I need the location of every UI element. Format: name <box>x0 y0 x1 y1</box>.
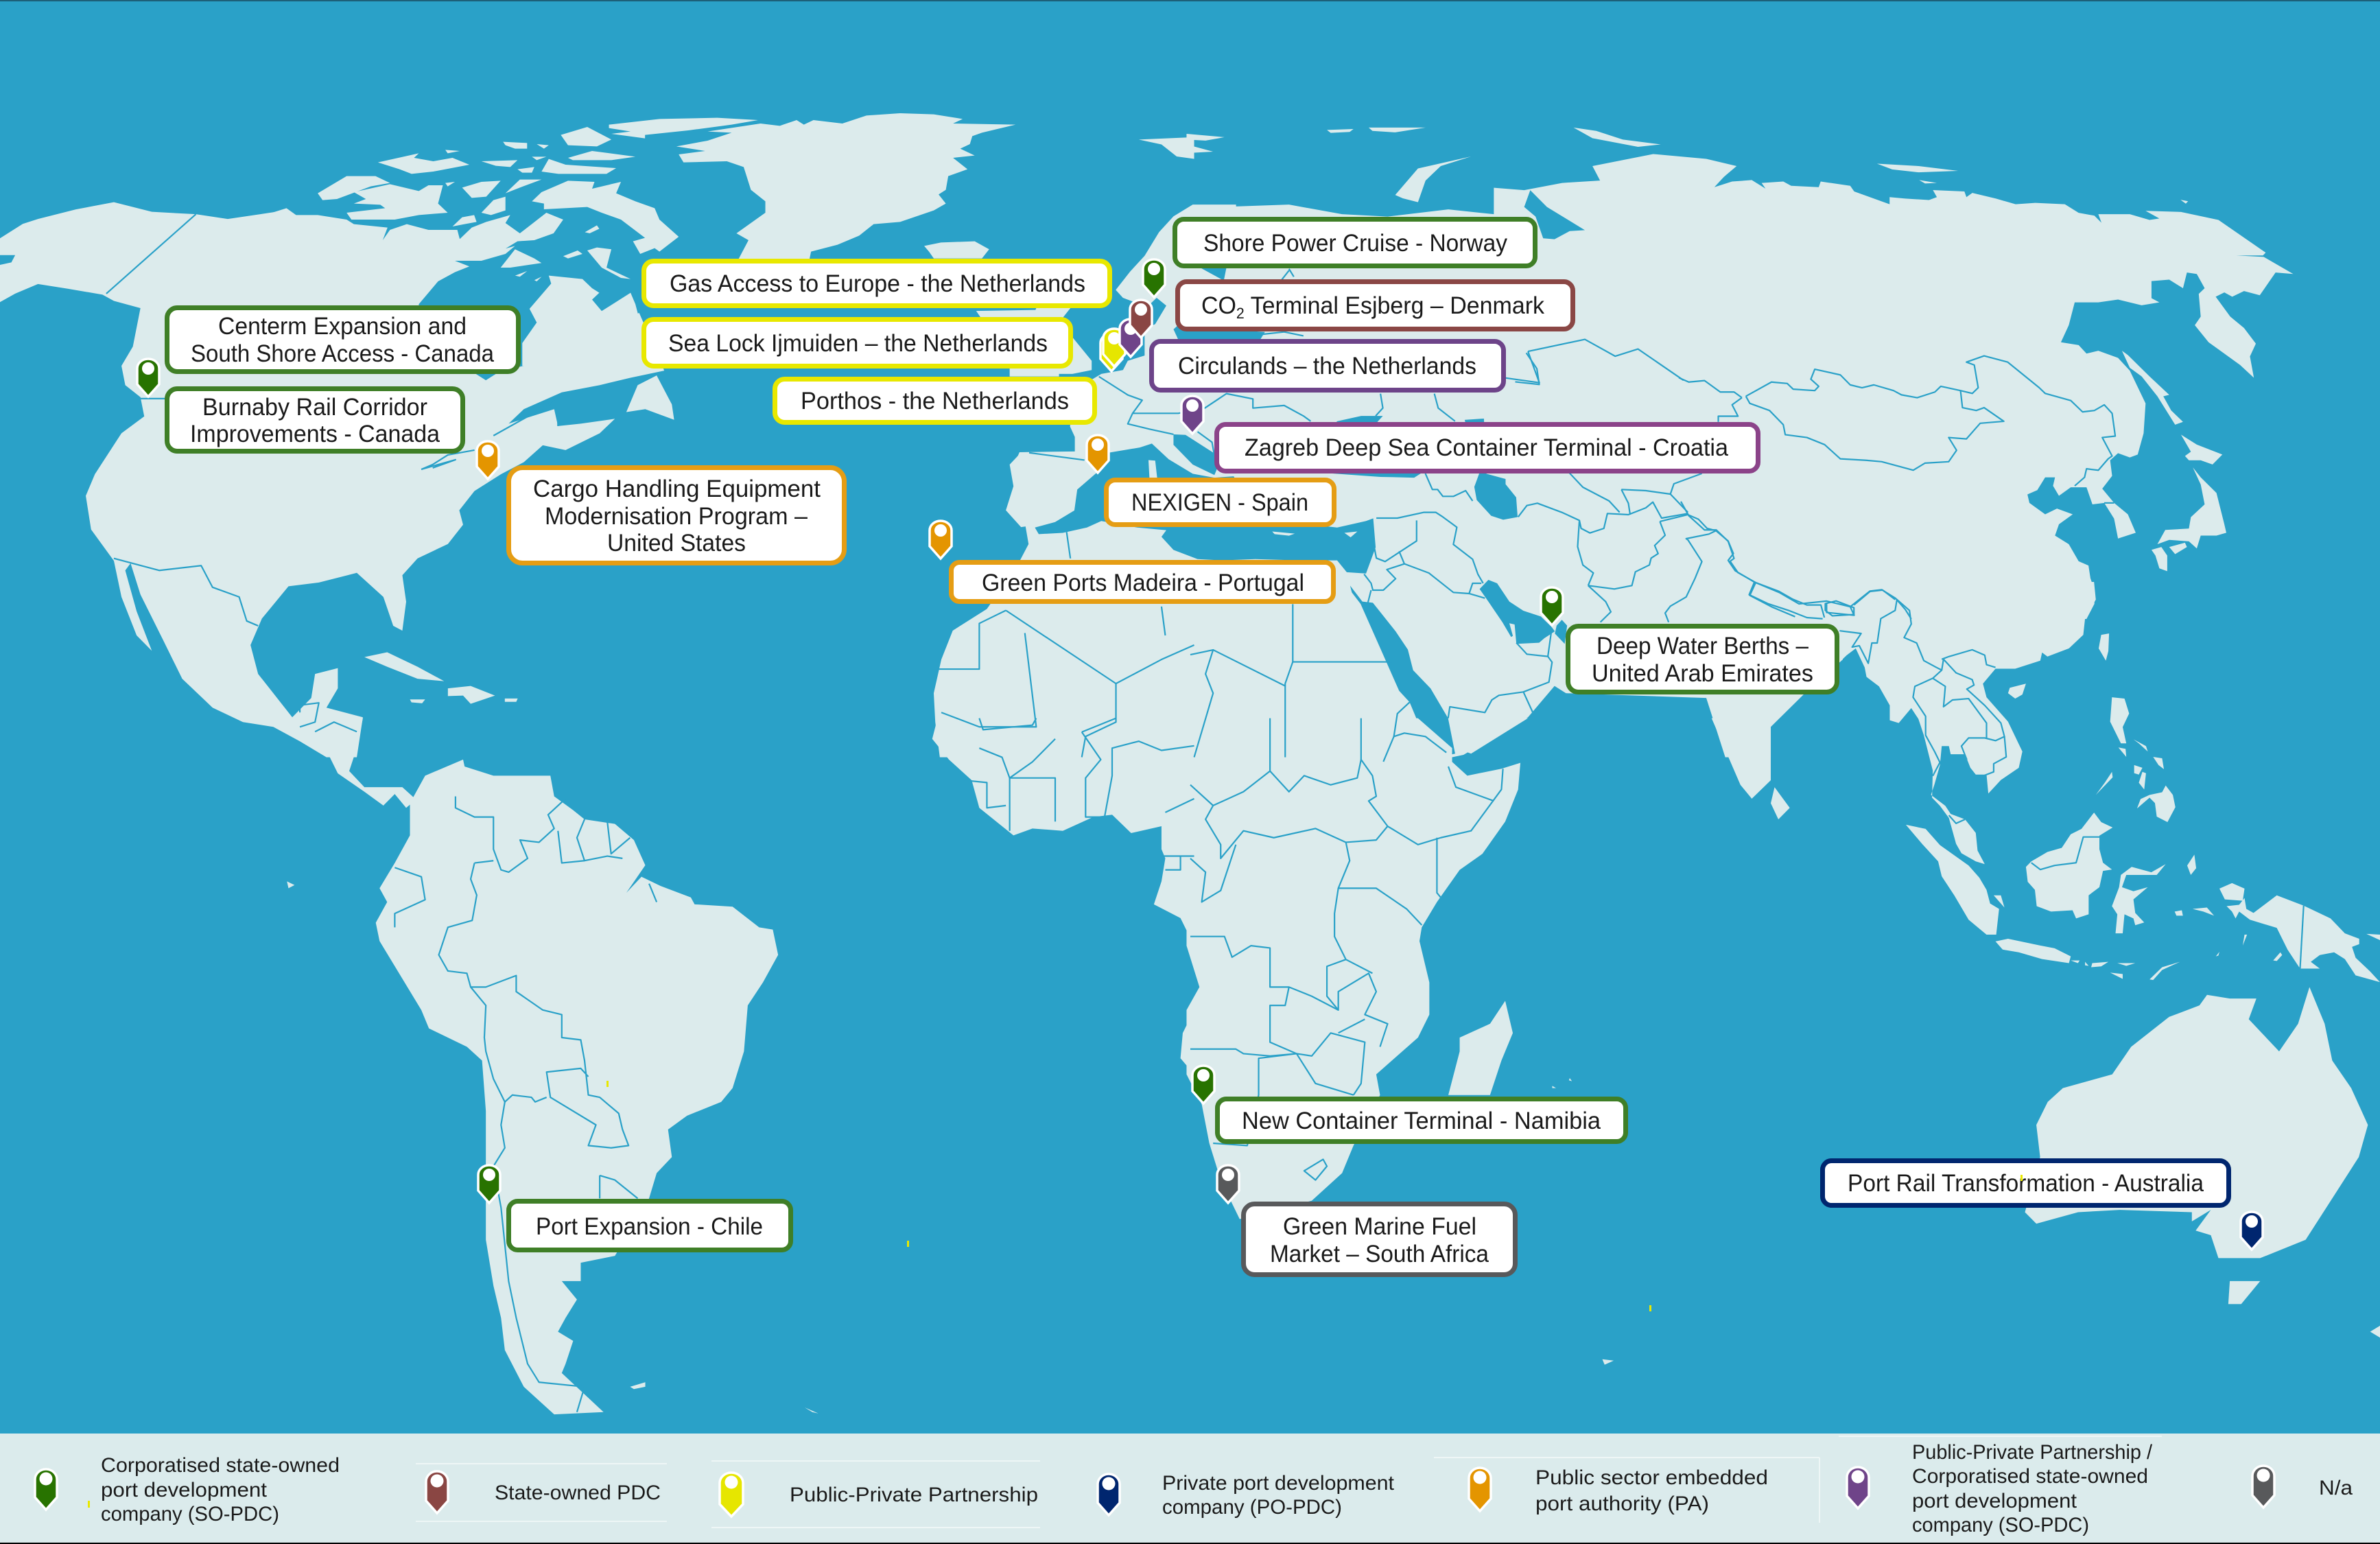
map: country borders Middle East and South Asia <box>1364 472 1824 762</box>
pin: Netherlands yellow rear <box>1100 334 1122 371</box>
legend item: corporatised state-owned: port development <box>101 1479 268 1501</box>
label: Shore Power <box>1175 220 1535 266</box>
legend item: public-private / corporatised: port development <box>1912 1490 2077 1512</box>
map: Arctic Canada, Greenland and Iceland <box>272 113 1015 366</box>
label: Porthos: Porthos - the Netherlands <box>801 388 1069 414</box>
label: Cargo Handling: United States <box>607 530 746 557</box>
label: Green Ports Madeira <box>951 563 1334 601</box>
label: Porthos <box>775 379 1095 423</box>
legend item: n/a <box>2252 1466 2353 1508</box>
label: Circulands: Circulands – the Netherlands <box>1178 353 1476 379</box>
pin: Australia navy <box>2241 1212 2263 1250</box>
label: Gas Access <box>644 261 1110 306</box>
map: country borders Europe <box>1029 269 1540 460</box>
label: Sea Lock <box>644 320 1070 366</box>
map: country borders central and southern Africa <box>1190 718 1503 1180</box>
label: Port Expansion <box>509 1201 790 1250</box>
label: Zagreb: Zagreb Deep Sea Container Terminal - Croatia <box>1245 434 1729 461</box>
pin: United States orange <box>477 441 499 479</box>
legend item: public sector embedded: Public sector embedded <box>1535 1466 1768 1489</box>
label: Deep Water Berths: United Arab Emirates <box>1592 660 1813 687</box>
pin: South Africa grey <box>1217 1165 1239 1203</box>
label: Centerm Expansion: Centerm Expansion and <box>218 313 467 340</box>
label: Circulands <box>1151 342 1504 390</box>
map: seas overlay <box>0 190 1585 755</box>
pin: Netherlands purple <box>1120 319 1142 357</box>
pin: Netherlands yellow front <box>1103 329 1125 366</box>
label: Burnaby Rail: Burnaby Rail Corridor <box>202 394 427 421</box>
map: Mediterranean islands <box>1148 460 1357 537</box>
legend item: private port development <box>1098 1472 1395 1519</box>
pin: Spain orange <box>1087 435 1109 473</box>
legend item: n/a: N/a <box>2319 1477 2353 1499</box>
label: Zagreb <box>1217 424 1758 471</box>
legend item: public sector embedded <box>1434 1457 1820 1523</box>
pin: United Arab Emirates green <box>1541 587 1563 625</box>
label: Shore Power: Shore Power Cruise - Norway <box>1203 230 1507 257</box>
map: Far East Russia, China, Korea and Japan <box>1679 170 2294 619</box>
label: Burnaby Rail: Improvements - Canada <box>190 421 440 447</box>
legend item: state-owned PDC: State-owned PDC <box>495 1482 661 1504</box>
label: Deep Water Berths: Deep Water Berths – <box>1597 633 1809 659</box>
label: Centerm Expansion: South Shore Access - Canada <box>191 340 494 367</box>
pin: Namibia green <box>1192 1066 1214 1103</box>
map: South-East Asia and New Guinea <box>1816 582 2380 982</box>
legend item: corporatised state-owned: company (SO-PDC) <box>101 1503 279 1525</box>
legend item: public sector embedded: port authority (PA) <box>1535 1493 1709 1515</box>
label: Cargo Handling <box>509 468 844 563</box>
legend item: private port development: company (PO-PDC) <box>1162 1496 1342 1519</box>
label: Burnaby Rail <box>167 388 462 452</box>
legend item: public-private / corporatised: company (SO-PDC) <box>1912 1514 2089 1536</box>
pin: Madeira orange <box>930 521 952 559</box>
label: Sea Lock: Sea Lock Ijmuiden – the Netherlands <box>668 330 1048 357</box>
legend item: public-private partnership <box>711 1460 1040 1528</box>
pin: Croatia purple <box>1181 396 1203 434</box>
legend item: corporatised state-owned <box>35 1454 340 1525</box>
stray yellow marks <box>606 1081 1651 1311</box>
legend item: private port development: Private port development <box>1162 1472 1395 1495</box>
legend band <box>0 1434 2380 1544</box>
map: country borders South-East Asia <box>1825 590 2304 968</box>
label: CO2 Terminal: Terminal Esjberg – Denmark <box>1245 292 1544 319</box>
legend item: public-private / corporatised: Public-Private Partnership / <box>1912 1441 2153 1464</box>
map: South America and Central America <box>273 718 1194 1414</box>
label: Green Marine Fuel: Market – South Africa <box>1270 1241 1489 1267</box>
legend item: corporatised state-owned: Corporatised state-owned <box>101 1454 340 1477</box>
label: Green Marine Fuel: Green Marine Fuel <box>1283 1213 1476 1240</box>
map: Europe-Asia land mass west <box>1186 128 2188 757</box>
map: country borders South America and West Africa <box>394 718 1194 1412</box>
legend <box>35 1436 2353 1536</box>
map: North America west and south <box>0 137 1194 757</box>
map: continental Europe <box>976 204 1236 548</box>
pin: Chile green <box>478 1165 500 1203</box>
label: Port Rail Transformation: Port Rail Transformation - Australia <box>1848 1170 2204 1197</box>
label: Port Expansion: Port Expansion - Chile <box>536 1213 763 1240</box>
map: southern Africa, India tip and Australia <box>1186 718 2380 1365</box>
label: Cargo Handling: Cargo Handling Equipment <box>533 476 821 502</box>
legend item: state-owned PDC <box>416 1463 667 1522</box>
label: Green Marine Fuel <box>1243 1204 1515 1275</box>
label: Cargo Handling: Modernisation Program – <box>545 503 808 530</box>
pin: Canada green <box>137 359 159 397</box>
label: New Container Terminal <box>1217 1099 1626 1142</box>
label: CO2 Terminal: CO <box>1201 292 1238 319</box>
label: Centerm Expansion <box>167 307 519 372</box>
label: NEXIGEN: NEXIGEN - Spain <box>1131 489 1308 516</box>
label: CO2 Terminal <box>1177 281 1572 329</box>
legend item: public-private / corporatised: Corporatised state-owned <box>1912 1465 2148 1488</box>
label: Deep Water Berths <box>1568 626 1837 692</box>
legend item: public-private / corporatised <box>1839 1436 2162 1536</box>
pin: Denmark brown <box>1130 300 1152 338</box>
label: New Container Terminal: New Container Terminal - Namibia <box>1242 1108 1601 1134</box>
label: Gas Access: Gas Access to Europe - the Netherlands <box>670 270 1085 297</box>
map: country borders Mongolia and China <box>1679 356 2115 619</box>
label: CO2 Terminal: 2 <box>1236 305 1245 322</box>
legend item: public-private partnership: Public-Private Partnership <box>790 1484 1038 1506</box>
label: NEXIGEN <box>1106 480 1334 524</box>
map: country borders west <box>106 214 1194 757</box>
pin: Norway green <box>1143 259 1165 297</box>
map: country borders Russia-Kazakhstan and North Africa <box>1190 270 1684 757</box>
label: Port Rail Transformation <box>1822 1161 2228 1205</box>
label: Green Ports Madeira: Green Ports Madeira - Portugal <box>982 570 1304 596</box>
